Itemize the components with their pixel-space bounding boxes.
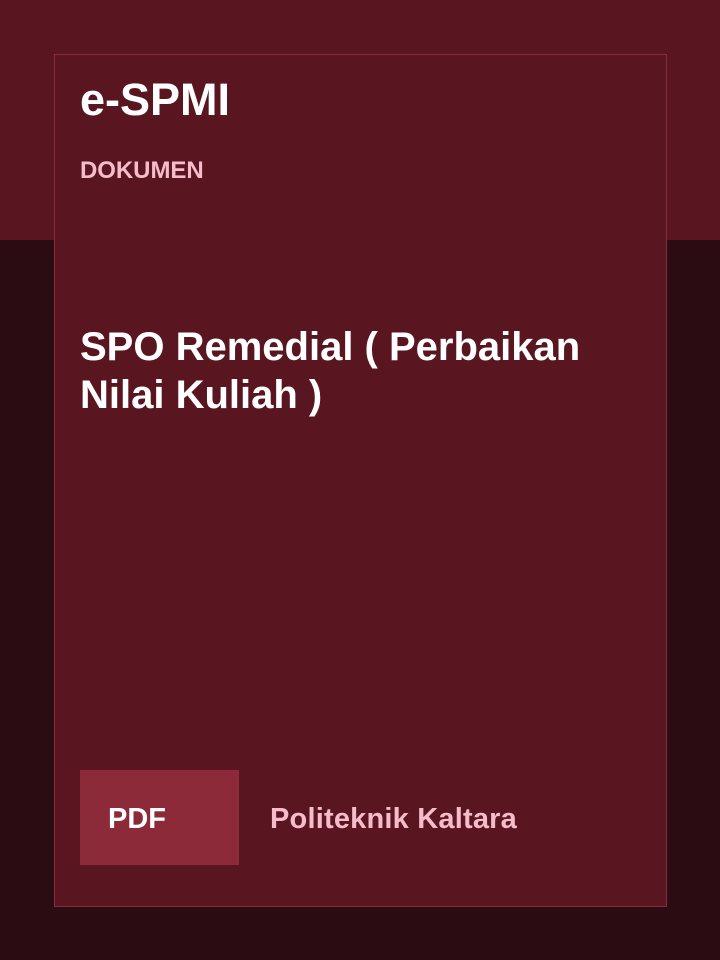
- top background band: [0, 0, 720, 240]
- heading: document name: Nilai Kuliah ): [80, 373, 322, 417]
- panel: document card: [54, 54, 667, 907]
- heading: document name: SPO Remedial ( Perbaikan: [80, 325, 580, 369]
- label: DOKUMEN: DOKUMEN: [80, 157, 204, 184]
- institution name: Politeknik Kaltara: [270, 803, 517, 835]
- badge: PDF: [80, 770, 239, 865]
- title: e-SPMI: e-SPMI: [80, 74, 230, 125]
- heading: document name: [80, 325, 580, 417]
- badge text: PDF: [108, 803, 166, 835]
